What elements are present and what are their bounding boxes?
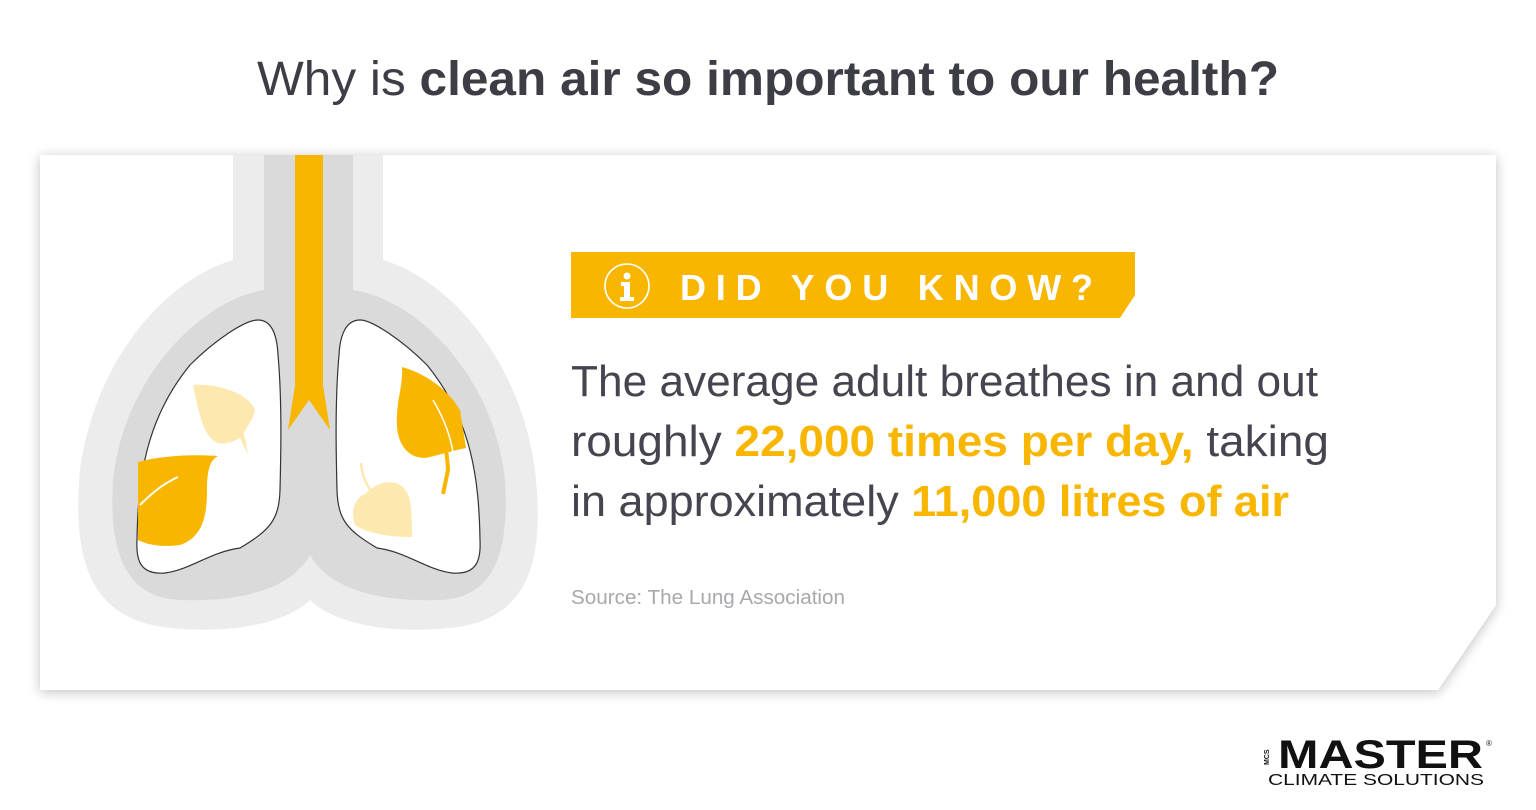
icon: info: [605, 264, 649, 308]
title: Why is clean air so important to our health?: [257, 53, 1279, 106]
left lung: [137, 320, 281, 573]
banner: did you know: [571, 252, 1135, 318]
logo: [1264, 733, 1492, 789]
panel: main card: [40, 155, 1496, 690]
source: Source: The Lung Association: [571, 587, 845, 609]
text block: fact: roughly 22,000 times per day, taking: [571, 417, 1329, 466]
icon: lungs: [78, 155, 538, 630]
banner: did you know: DID YOU KNOW?: [680, 267, 1093, 308]
right lung: [336, 320, 480, 573]
logo: MCS: [1264, 749, 1271, 765]
text block: fact: [571, 357, 1329, 526]
logo: CLIMATE SOLUTIONS: [1268, 772, 1484, 789]
text block: fact: The average adult breathes in and out: [571, 357, 1318, 406]
text block: fact: in approximately 11,000 litres of air: [571, 477, 1289, 526]
logo: MASTER: [1278, 733, 1483, 777]
logo: ®: [1486, 739, 1492, 748]
